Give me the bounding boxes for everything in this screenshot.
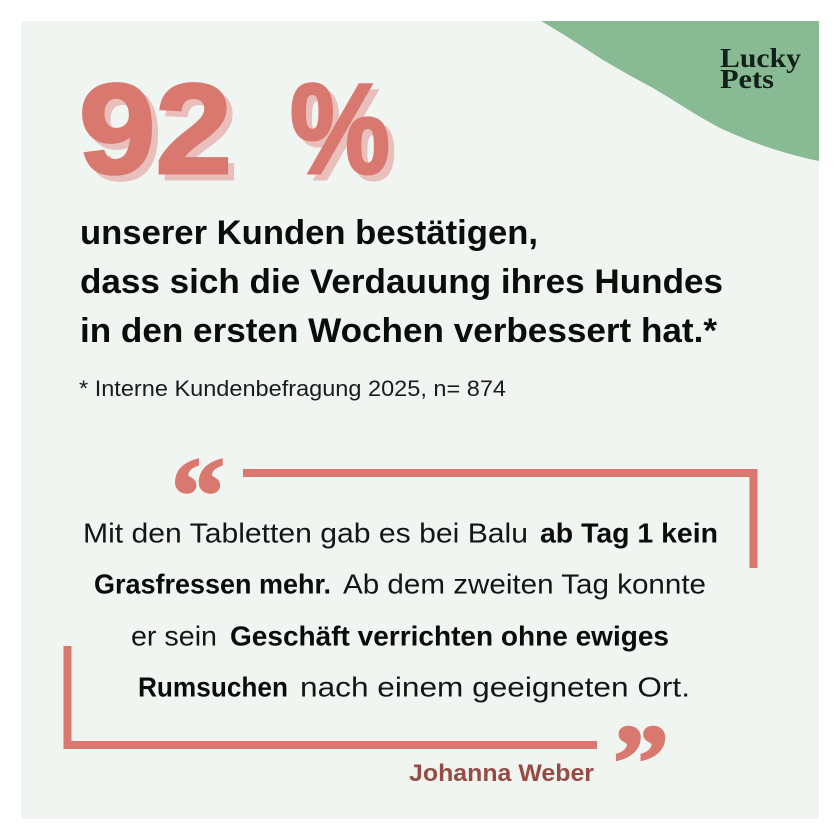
icon: opening quotation mark: “	[171, 437, 225, 556]
logo: Lucky Pets	[720, 43, 802, 94]
author name: Johanna Weber	[409, 760, 594, 787]
testimonial quote: er sein	[131, 620, 217, 652]
headline text: in den ersten Wochen verbessert hat.*	[80, 312, 718, 350]
headline text	[80, 214, 723, 350]
testimonial quote: Geschäft verrichten ohne ewiges	[230, 620, 669, 652]
testimonial quote: Grasfressen mehr.	[94, 568, 331, 600]
quote frame: bottom left	[68, 646, 597, 745]
testimonial quote: nach einem geeigneten Ort.	[300, 672, 690, 702]
quote frame: top right	[243, 473, 754, 568]
statistic foreground: %	[290, 58, 390, 201]
logo: Lucky Pets: Pets	[720, 64, 774, 94]
green corner shape	[541, 21, 819, 161]
testimonial quote: Rumsuchen	[138, 672, 288, 702]
testimonial quote: Ab dem zweiten Tag konnte	[343, 568, 706, 600]
testimonial quote: ab Tag 1 kein	[540, 518, 718, 548]
headline text: dass sich die Verdauung ihres Hundes	[80, 263, 723, 301]
statistic shadow: %	[296, 64, 396, 207]
statistic shadow: 92	[85, 64, 238, 207]
footnote: * Interne Kundenbefragung 2025, n= 874	[79, 376, 506, 401]
icon: closing quotation mark: ”	[613, 704, 669, 823]
statistic foreground: 92	[79, 58, 232, 201]
testimonial quote: Mit den Tabletten gab es bei Balu	[83, 518, 528, 548]
testimonial quote	[83, 518, 718, 702]
headline text: unserer Kunden bestätigen,	[80, 214, 538, 252]
statistic shadow	[85, 64, 396, 207]
logo: Lucky Pets: Lucky	[720, 43, 802, 73]
big statistic: 92 %	[79, 58, 396, 207]
statistic foreground	[79, 58, 390, 201]
